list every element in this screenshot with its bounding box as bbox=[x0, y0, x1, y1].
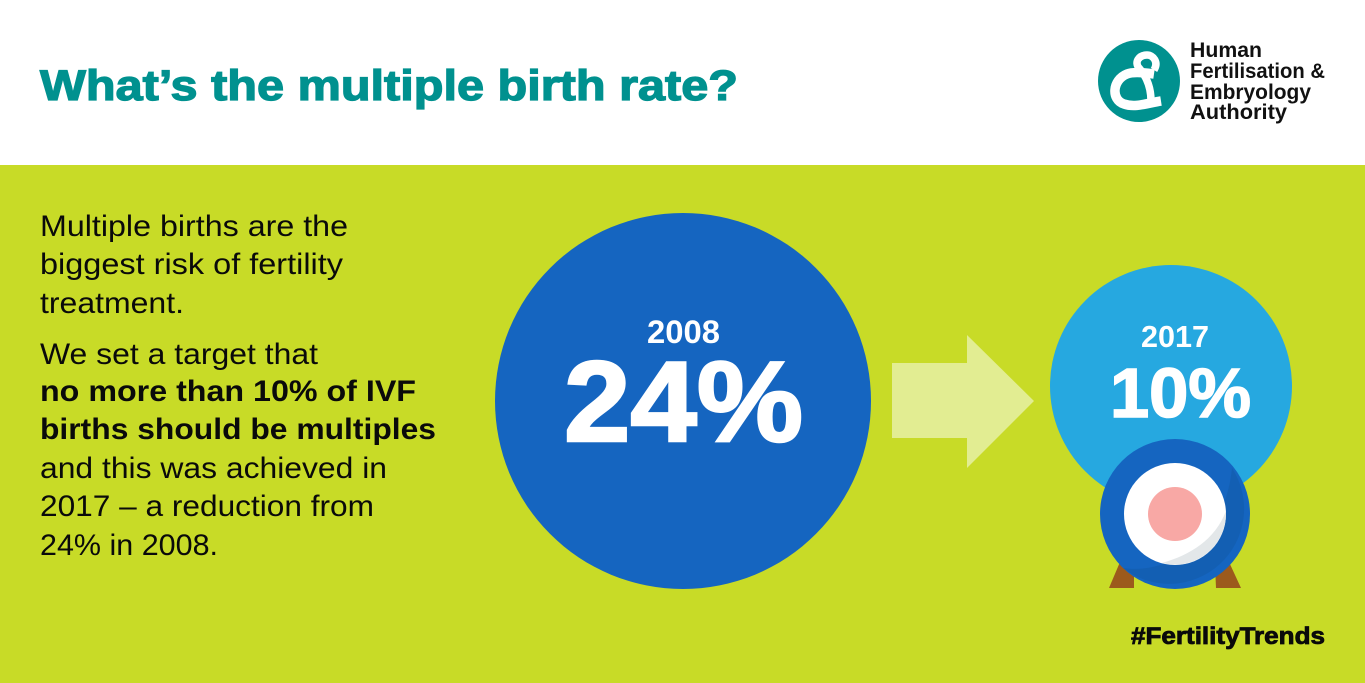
logo wordmark bbox=[1190, 39, 1325, 124]
target text block: 24% in 2008. bbox=[40, 529, 218, 562]
logo wordmark: Human bbox=[1190, 39, 1262, 62]
main green panel bbox=[0, 165, 1365, 683]
hashtag: #FertilityTrends bbox=[1131, 623, 1325, 650]
logo wordmark: Embryology bbox=[1190, 81, 1311, 104]
target text block: 2017 – a reduction from bbox=[40, 490, 374, 523]
intro text block: biggest risk of fertility bbox=[40, 248, 343, 281]
intro text block: Multiple births are the bbox=[40, 210, 348, 243]
target text block bbox=[40, 338, 436, 562]
2008 circle bbox=[495, 213, 871, 589]
target rings bbox=[1100, 439, 1250, 589]
header panel bbox=[0, 0, 1365, 165]
target text block: and this was achieved in bbox=[40, 452, 387, 485]
target text block: no more than 10% of IVF bbox=[40, 375, 416, 408]
icon: target on easel bbox=[1100, 439, 1250, 589]
2017 label: 2017 bbox=[1141, 319, 1209, 354]
logo: Human Fertilisation & Embryology Authority bbox=[1098, 39, 1325, 124]
2017 circle bbox=[1050, 265, 1292, 507]
logo mark bbox=[1098, 40, 1180, 122]
intro text block bbox=[40, 210, 348, 320]
title: What’s the multiple birth rate? bbox=[40, 62, 738, 110]
logo wordmark: Fertilisation & bbox=[1190, 60, 1325, 83]
target text block: births should be multiples bbox=[40, 413, 436, 446]
intro text block: treatment. bbox=[40, 287, 184, 320]
target text block: We set a target that bbox=[40, 338, 319, 371]
arrow bbox=[892, 335, 1034, 468]
10% value: 10% bbox=[1110, 354, 1251, 432]
24% value: 24% bbox=[564, 339, 803, 466]
easel legs bbox=[1109, 562, 1134, 588]
2008 label: 2008 bbox=[647, 314, 720, 350]
logo wordmark: Authority bbox=[1190, 101, 1287, 124]
